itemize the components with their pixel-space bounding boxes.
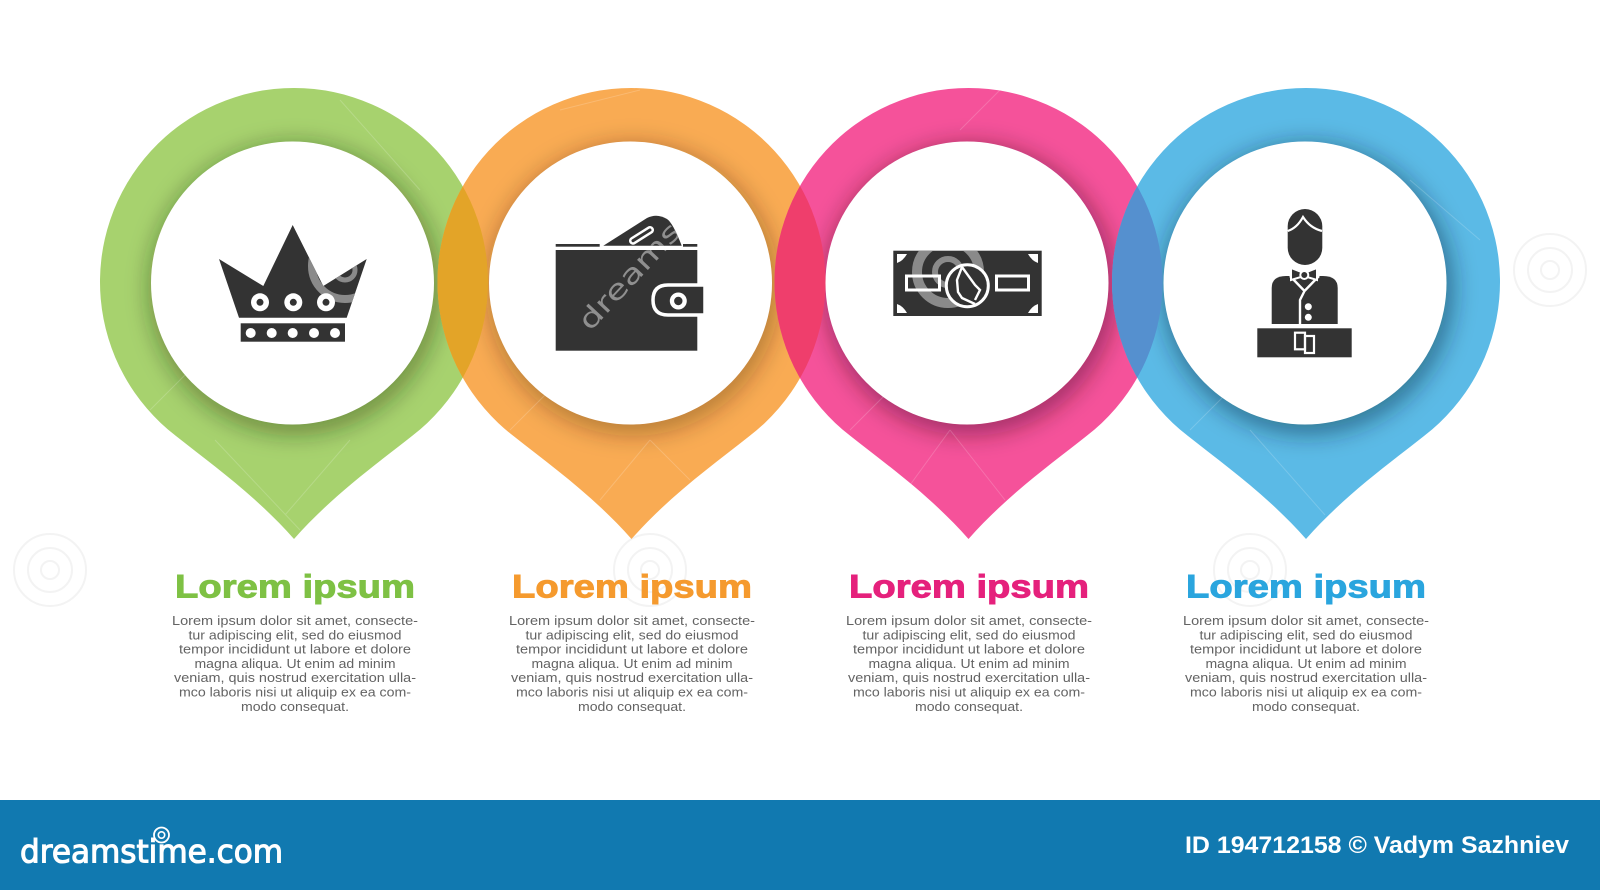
overlap: orange and pink [774, 186, 826, 378]
icon: wallet [556, 206, 705, 351]
column text: blue [1183, 568, 1429, 714]
overlap: green and orange [438, 186, 488, 378]
body text: veniam, quis nostrud exercitation ulla- [174, 671, 416, 685]
heading: Lorem ipsum [512, 568, 752, 604]
white circle with banknote icon [826, 142, 1108, 424]
body text: magna aliqua. Ut enim ad minim [532, 657, 732, 671]
body text: Lorem ipsum dolor sit amet, consecte- [1183, 614, 1429, 628]
body text: modo consequat. [241, 700, 349, 714]
icon: banknote [893, 250, 1042, 316]
icon: concierge person [1257, 209, 1352, 357]
pin marker: blue [1112, 88, 1500, 539]
body text: mco laboris nisi ut aliquip ex ea com- [853, 686, 1085, 700]
body text: mco laboris nisi ut aliquip ex ea com- [179, 686, 411, 700]
body text: magna aliqua. Ut enim ad minim [868, 657, 1070, 671]
body text: tur adipiscing elit, sed do eiusmod [188, 628, 402, 642]
column text: orange [509, 568, 755, 714]
body text [509, 614, 755, 714]
heading: Lorem ipsum [175, 568, 415, 604]
body text: modo consequat. [1252, 700, 1360, 714]
body text: tempor incididunt ut labore et dolore [853, 643, 1085, 657]
footer banner [0, 800, 1600, 890]
body text: tempor incididunt ut labore et dolore [516, 643, 748, 657]
body text: mco laboris nisi ut aliquip ex ea com- [1190, 686, 1422, 700]
body text: modo consequat. [578, 700, 686, 714]
body text: veniam, quis nostrud exercitation ulla- [1185, 671, 1427, 685]
body text: tempor incididunt ut labore et dolore [179, 643, 411, 657]
body text: magna aliqua. Ut enim ad minim [194, 657, 396, 671]
body text: tur adipiscing elit, sed do eiusmod [526, 628, 738, 642]
watermark text on wallet: dreamst [572, 206, 697, 337]
body text: mco laboris nisi ut aliquip ex ea com- [516, 686, 748, 700]
column text: pink [846, 568, 1092, 714]
body text: tur adipiscing elit, sed do eiusmod [862, 628, 1076, 642]
icon: logo spiral [154, 828, 169, 842]
icon: crown [219, 225, 378, 342]
body text: veniam, quis nostrud exercitation ulla- [848, 671, 1090, 685]
pin marker: orange [438, 88, 826, 539]
body text [846, 614, 1092, 714]
body text [172, 614, 418, 714]
body text: veniam, quis nostrud exercitation ulla- [511, 671, 753, 685]
body text: Lorem ipsum dolor sit amet, consecte- [172, 614, 418, 628]
body text: tur adipiscing elit, sed do eiusmod [1200, 628, 1412, 642]
pin marker: green [100, 88, 488, 539]
white circle with wallet icon [489, 142, 772, 424]
body text: modo consequat. [915, 700, 1023, 714]
body text: Lorem ipsum dolor sit amet, consecte- [509, 614, 755, 628]
heading: Lorem ipsum [1186, 568, 1426, 604]
white circle with crown icon [151, 142, 434, 424]
body text: tempor incididunt ut labore et dolore [1190, 643, 1422, 657]
heading: Lorem ipsum [849, 568, 1089, 604]
column text: green [172, 568, 418, 714]
pin marker: pink [774, 88, 1162, 539]
image credit: ID 194712158 © Vadym Sazhniev [1185, 832, 1570, 859]
logo text: dreamstime.com [20, 832, 283, 870]
body text: Lorem ipsum dolor sit amet, consecte- [846, 614, 1092, 628]
white circle with concierge icon [1164, 142, 1446, 424]
body text: magna aliqua. Ut enim ad minim [1206, 657, 1406, 671]
body text [1183, 614, 1429, 714]
overlap: pink and blue [1112, 186, 1162, 378]
